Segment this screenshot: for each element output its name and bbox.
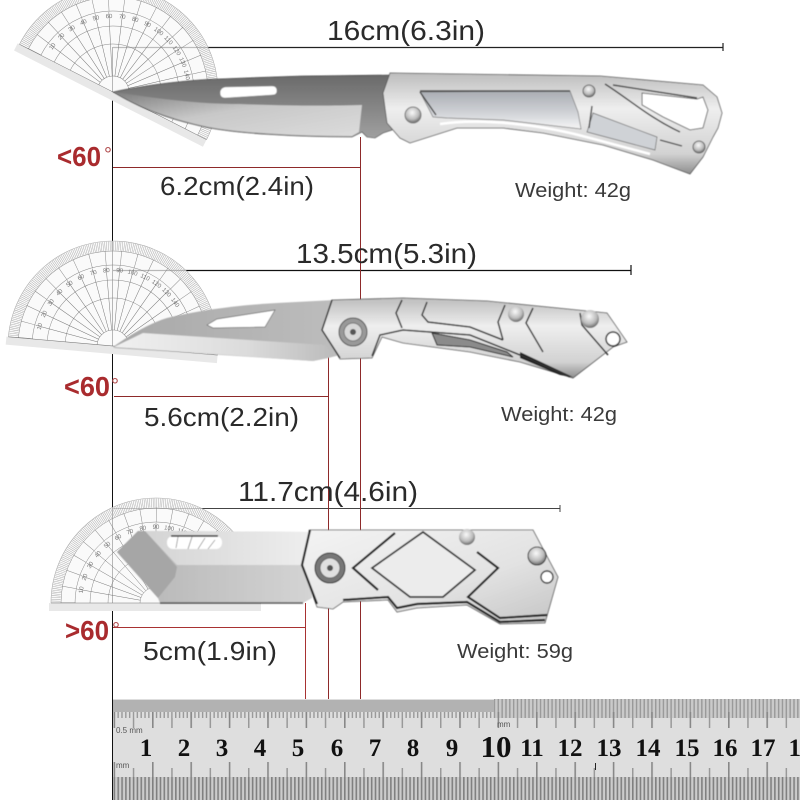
knife 2 bbox=[113, 298, 627, 378]
label: knife 1 angle: <60 bbox=[57, 141, 101, 172]
label: knife 2 weight: Weight: 42g bbox=[501, 404, 617, 426]
ruler bbox=[113, 699, 800, 800]
ruler numbers: 10 bbox=[480, 729, 512, 764]
protractor 3: 70 bbox=[126, 528, 135, 536]
label: knife 1 overall length: 16cm(6.3in) bbox=[327, 15, 485, 46]
knife 1 blade bbox=[113, 75, 392, 138]
protractor 1: 60 bbox=[106, 14, 113, 20]
knife 3 lanyard hole bbox=[541, 571, 553, 583]
ruler scale label mm: mm bbox=[116, 761, 130, 770]
knife 1 rear panel bbox=[587, 113, 657, 150]
ruler top band bbox=[113, 700, 494, 712]
knife 1 handle panel bbox=[420, 91, 581, 129]
knife 2 rear rivet bbox=[581, 310, 599, 328]
ruler bottom half-centimetre ticks bbox=[113, 768, 800, 777]
ruler numbers: 12 bbox=[558, 735, 582, 762]
knife 2 rivet bbox=[508, 306, 524, 322]
protractor 3: 30 bbox=[87, 561, 96, 570]
vertical reference line bbox=[112, 47, 114, 800]
protractor 2: 80 bbox=[103, 268, 111, 275]
knife 2 blade cut-out bbox=[207, 310, 275, 328]
label: knife 1 degree mark: ° bbox=[104, 144, 112, 166]
ruler numbers: 11 bbox=[520, 735, 544, 762]
protractor 3: 100 bbox=[164, 525, 175, 533]
ruler bottom millimetre ticks bbox=[113, 777, 800, 800]
ruler numbers: 8 bbox=[407, 735, 419, 762]
knife 3 bbox=[117, 529, 558, 624]
protractor 1: 10 bbox=[49, 42, 58, 51]
ruler numbers: 17 bbox=[750, 735, 776, 762]
protractor 2: 100 bbox=[127, 269, 139, 278]
knife 3 blade slot bbox=[167, 536, 222, 549]
protractor 2: 120 bbox=[150, 279, 162, 290]
knife 3 blade tip facet bbox=[117, 531, 177, 598]
ruler scale label mm right: mm bbox=[497, 720, 511, 729]
ruler numbers: 6 bbox=[331, 735, 343, 762]
knife 2 handle slot bbox=[432, 333, 513, 357]
protractor 1: 30 bbox=[68, 24, 77, 33]
knife 1 handle highlight bbox=[440, 122, 650, 154]
knife 2 blade lower bevel bbox=[114, 333, 333, 361]
label: knife 3 angle: >60 bbox=[65, 615, 109, 646]
protractor 3: 110 bbox=[176, 528, 188, 537]
protractor 3: 90 bbox=[153, 525, 160, 531]
ruler numbers bbox=[140, 729, 800, 764]
ruler scale label 0.5 mm: 0.5 mm bbox=[116, 726, 143, 735]
label: knife 3 weight: Weight: 59g bbox=[457, 641, 573, 663]
ruler numbers: 13 bbox=[596, 735, 622, 762]
label: knife 2 angle: <60 bbox=[64, 371, 110, 402]
ruler numbers: 16 bbox=[712, 735, 738, 762]
label: knife 1 weight: Weight: 42g bbox=[515, 180, 631, 202]
protractor 3: 20 bbox=[82, 573, 90, 582]
knife 1 blade slot bbox=[220, 86, 277, 98]
protractor 1: 90 bbox=[143, 21, 152, 30]
ruler top band right bbox=[494, 699, 800, 718]
knife 1 rivet bbox=[583, 85, 595, 97]
dimension line: knife 1 overall length bbox=[113, 43, 723, 51]
label: knife 3 overall length: 11.7cm(4.6in) bbox=[238, 476, 418, 507]
protractor 3: 50 bbox=[103, 541, 113, 550]
knife 2 lanyard hole bbox=[606, 332, 620, 346]
label: knife 2 blade length: 5.6cm(2.2in) bbox=[144, 402, 299, 432]
ruler numbers: 9 bbox=[446, 735, 458, 762]
protractor 3: 10 bbox=[79, 586, 86, 594]
knife 1 handle bbox=[383, 73, 722, 174]
ruler top millimetre ticks bbox=[113, 712, 494, 718]
protractor 3: 40 bbox=[94, 550, 103, 559]
knife 3 blade bbox=[117, 531, 312, 603]
protractor 2: 20 bbox=[41, 309, 49, 319]
protractor 1: 50 bbox=[92, 15, 101, 23]
knife 3 diamond panel bbox=[372, 532, 475, 597]
knife 1 pivot screw bbox=[405, 107, 421, 123]
label: knife 2 degree mark: ° bbox=[111, 375, 119, 397]
label: knife 3 blade length: 5cm(1.9in) bbox=[143, 636, 277, 666]
red guide lines: knife 1 blade length bbox=[113, 137, 360, 700]
ruler stray mark bbox=[594, 763, 596, 770]
knife 2 lower dark groove bbox=[520, 352, 573, 377]
protractor 1: 40 bbox=[79, 19, 89, 27]
knife 3 rear rivet bbox=[528, 547, 546, 565]
knife 3 pivot screw bbox=[315, 553, 345, 583]
label: knife 2 overall length: 13.5cm(5.3in) bbox=[296, 238, 477, 269]
protractor 1: 150 bbox=[185, 83, 191, 94]
ruler numbers: 3 bbox=[216, 735, 228, 762]
red guide lines: knife 2 blade length bbox=[114, 355, 328, 700]
knife 3 grooves bbox=[302, 530, 547, 622]
label: knife 1 blade length: 6.2cm(2.4in) bbox=[160, 171, 314, 201]
ruler top half-centimetre ticks bbox=[113, 718, 800, 728]
protractor 2: 60 bbox=[77, 274, 86, 282]
protractor 2: 30 bbox=[47, 298, 56, 307]
knife 1 grooves bbox=[420, 84, 697, 146]
dimension line: knife 3 overall length bbox=[113, 505, 560, 512]
knife 3 edge bbox=[160, 602, 303, 604]
dimension line: knife 2 overall length bbox=[113, 265, 631, 275]
protractor 3 bbox=[49, 498, 261, 611]
ruler numbers: 14 bbox=[636, 735, 661, 762]
knife 3 handle bbox=[302, 530, 558, 624]
protractor 1: 130 bbox=[177, 57, 187, 69]
protractor 2: 90 bbox=[116, 268, 124, 275]
knife 3 rivet bbox=[459, 529, 475, 545]
ruler bottom band bbox=[113, 777, 800, 800]
ruler top millimetre ticks right bbox=[494, 699, 800, 718]
protractor 1: 120 bbox=[171, 45, 182, 58]
ruler body bbox=[113, 699, 800, 800]
protractor 1: 110 bbox=[162, 35, 174, 47]
protractor 1 bbox=[14, 0, 254, 147]
protractor 1: 70 bbox=[118, 14, 126, 21]
knife 1 bbox=[113, 73, 722, 174]
knife 2 grooves bbox=[322, 300, 608, 377]
red guide lines: knife 3 blade length bbox=[113, 603, 306, 700]
ruler top centimetre ticks bbox=[113, 712, 800, 728]
knife 2 handle bbox=[322, 298, 627, 378]
protractor 2 bbox=[6, 232, 227, 363]
protractor 1: 80 bbox=[131, 16, 140, 24]
protractor 1: 100 bbox=[152, 27, 164, 38]
protractor 3: 80 bbox=[139, 525, 147, 533]
ruler numbers: 5 bbox=[292, 735, 304, 762]
protractor 2: 130 bbox=[160, 287, 172, 299]
ruler bottom centimetre ticks bbox=[113, 762, 800, 777]
protractor 2: 10 bbox=[37, 322, 44, 331]
protractor 1: 20 bbox=[57, 32, 67, 42]
ruler numbers: 2 bbox=[178, 735, 190, 762]
ruler numbers: 15 bbox=[674, 735, 700, 762]
protractor 1: 140 bbox=[182, 70, 190, 81]
knife 2 pivot screw bbox=[339, 318, 367, 346]
protractor 2: 40 bbox=[55, 288, 65, 297]
ruler numbers: 1 bbox=[140, 735, 152, 762]
knife 1 rear rivet bbox=[693, 141, 705, 153]
ruler numbers: 7 bbox=[369, 735, 381, 762]
ruler numbers: 4 bbox=[254, 735, 267, 762]
protractor 2: 110 bbox=[139, 273, 151, 283]
protractor 3: 60 bbox=[114, 533, 123, 542]
protractor 2: 140 bbox=[169, 297, 180, 309]
knife 1 blade bevel bbox=[113, 92, 362, 136]
label: knife 3 degree mark: ° bbox=[112, 619, 120, 641]
protractor 2: 70 bbox=[90, 270, 98, 277]
knife 2 blade bbox=[113, 300, 340, 361]
protractor 2: 50 bbox=[66, 280, 75, 289]
knife 3 blade upper face bbox=[145, 531, 312, 565]
